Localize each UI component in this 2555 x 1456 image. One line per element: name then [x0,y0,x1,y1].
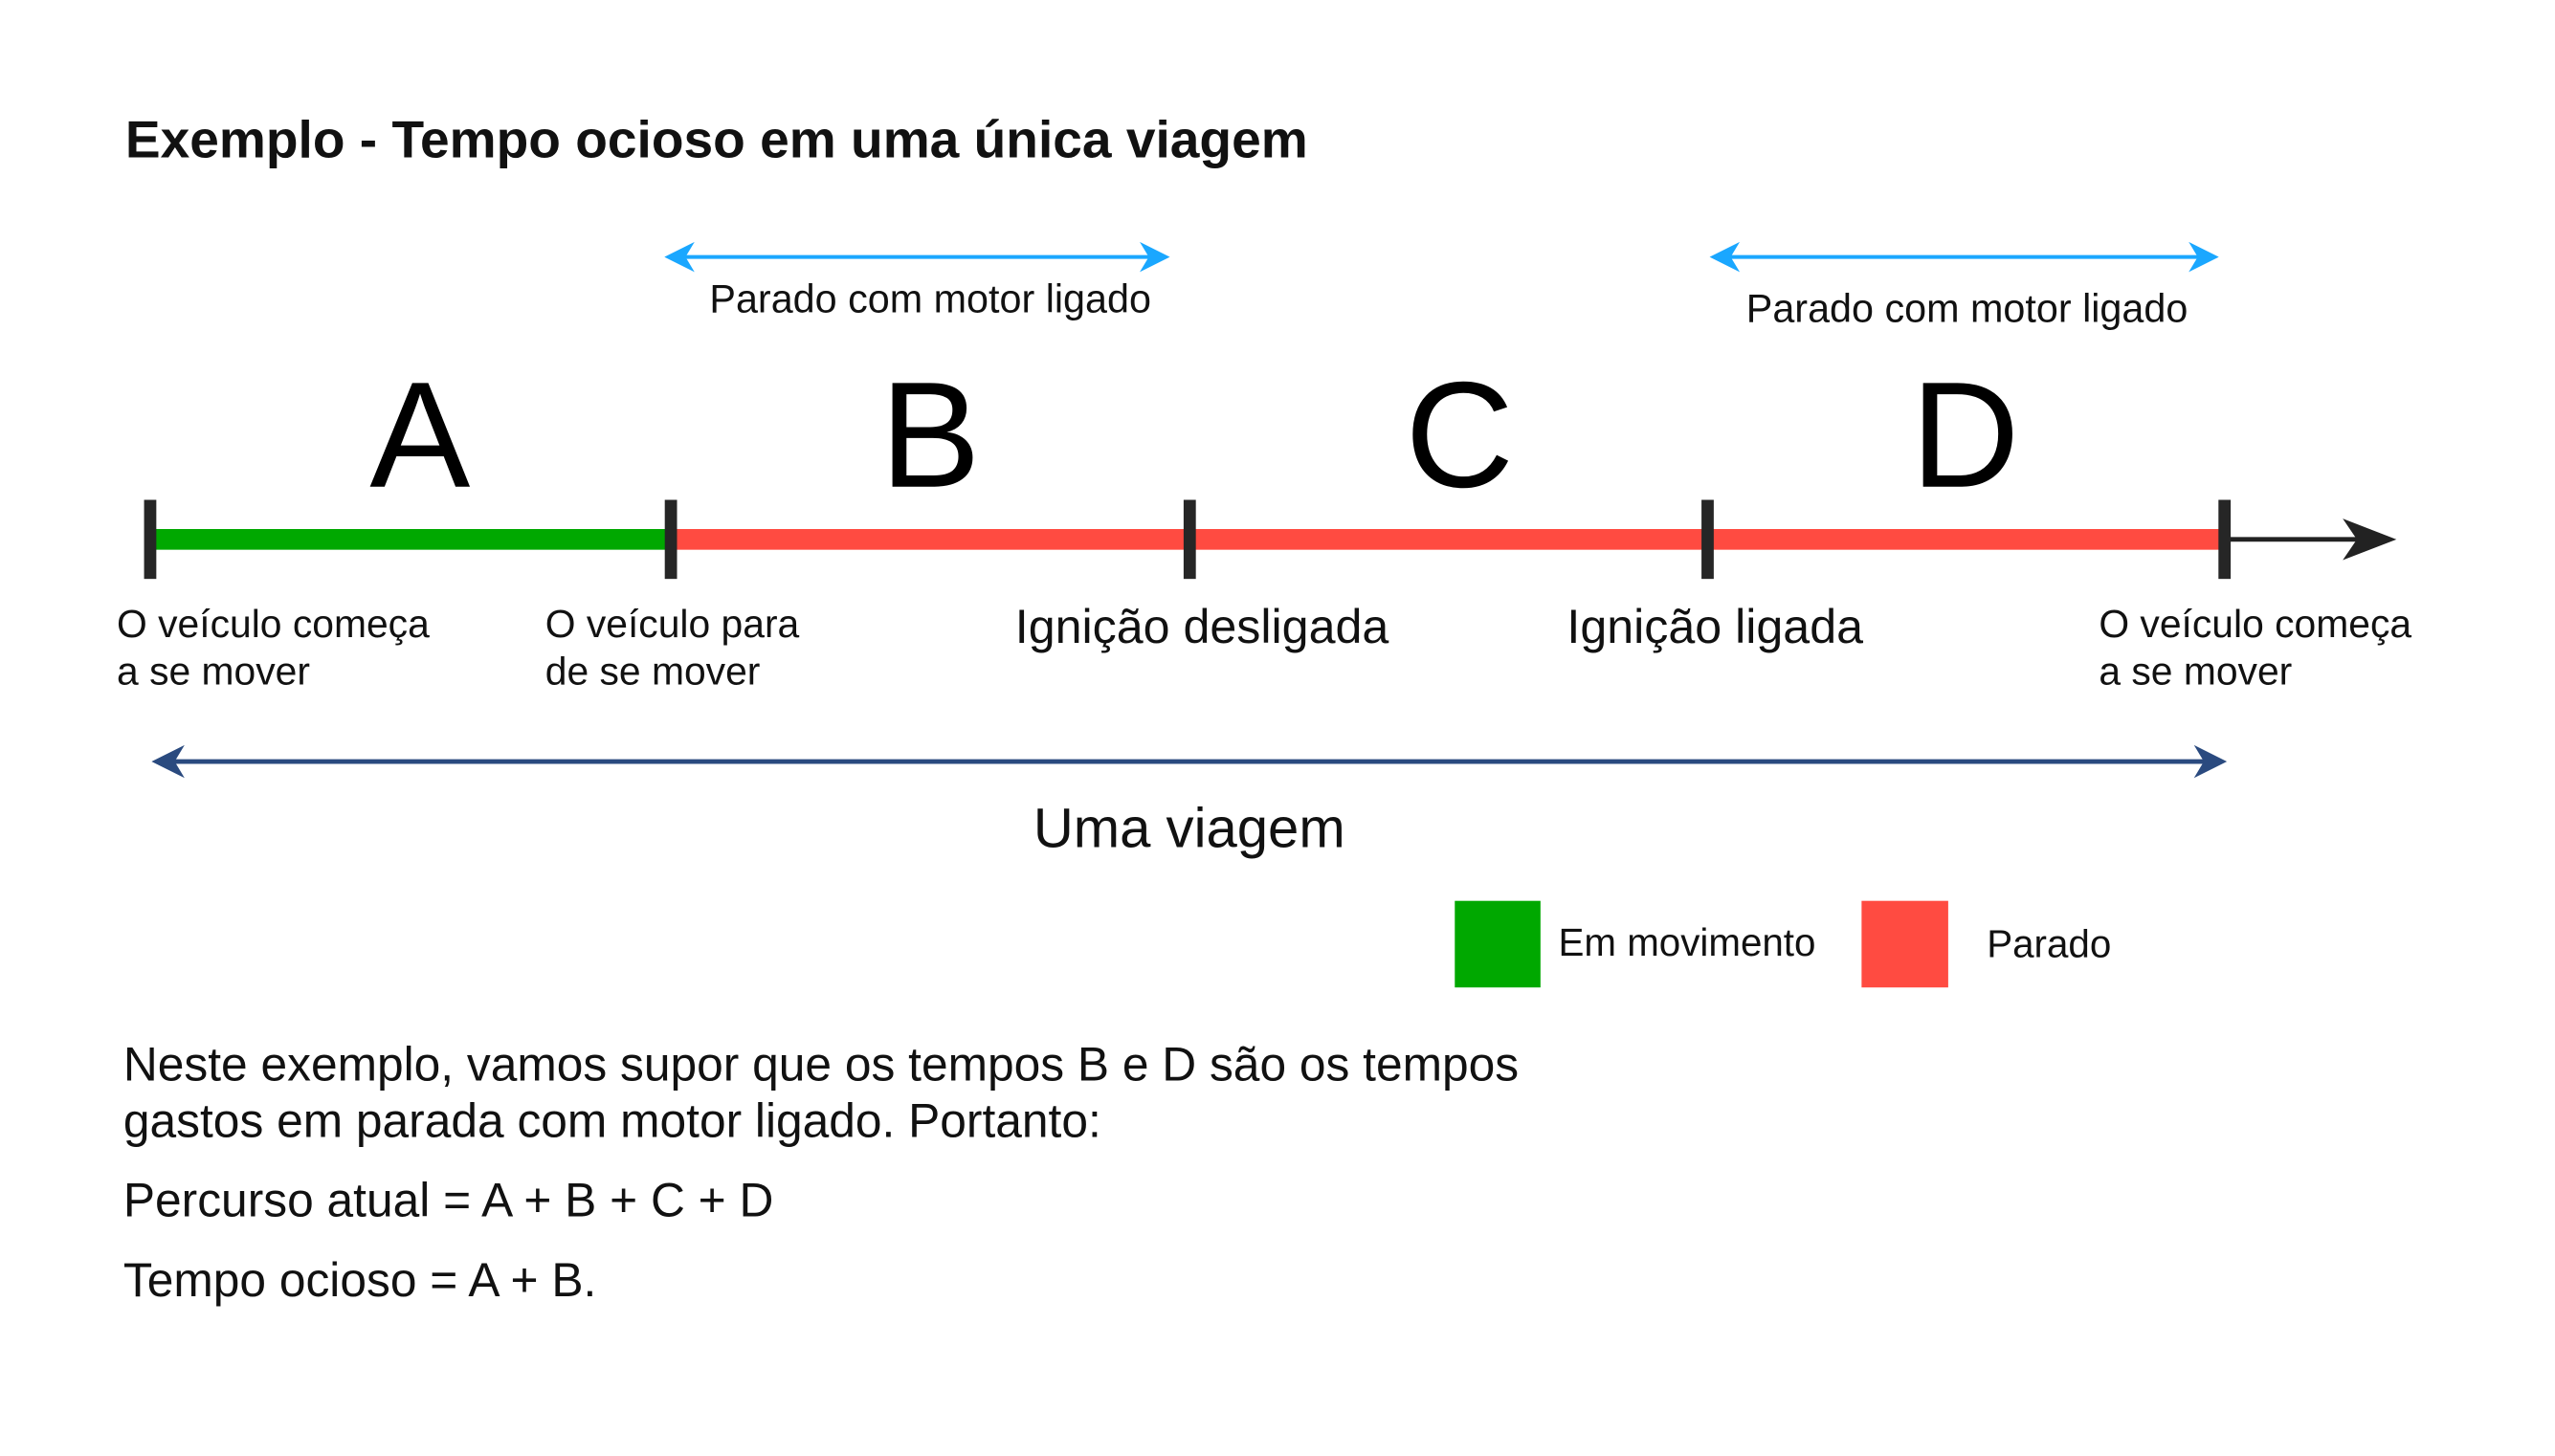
arrow: idle B: Parado com motor ligado [709,277,1151,321]
segment letters: C [1405,351,1514,519]
timeline labels: O veículo começa [2099,602,2411,646]
timeline labels: de se mover [545,649,760,693]
legend: Parado [1987,922,2111,966]
segment letters: B [880,351,981,519]
explanation text: Percurso atual = A + B + C + D [123,1173,773,1226]
timeline labels: a se mover [2099,649,2292,693]
legend [1455,901,2111,987]
timeline labels: a se mover [117,649,310,693]
timeline labels: O veículo começa [117,602,430,646]
timeline labels: Ignição desligada [1015,600,1389,653]
explanation text: Tempo ocioso = A + B. [123,1253,596,1307]
title: Exemplo - Tempo ocioso em uma única viagem [125,109,1308,168]
segment letters: A [369,351,470,519]
segment letters: D [1911,351,2019,519]
arrow: one trip: Uma viagem [1033,798,1345,860]
legend: Em movimento [1559,920,1815,964]
timeline [144,500,2396,579]
timeline labels: O veículo para [545,602,800,646]
explanation text: gastos em parada com motor ligado. Portanto: [123,1094,1101,1148]
timeline labels [117,600,2411,693]
segment letters [369,351,2019,519]
explanation text [123,1038,1519,1307]
arrow: idle D: Parado com motor ligado [1746,287,2188,331]
timeline labels: Ignição ligada [1566,600,1863,653]
explanation text: Neste exemplo, vamos supor que os tempos B e D são os tempos [123,1038,1519,1092]
